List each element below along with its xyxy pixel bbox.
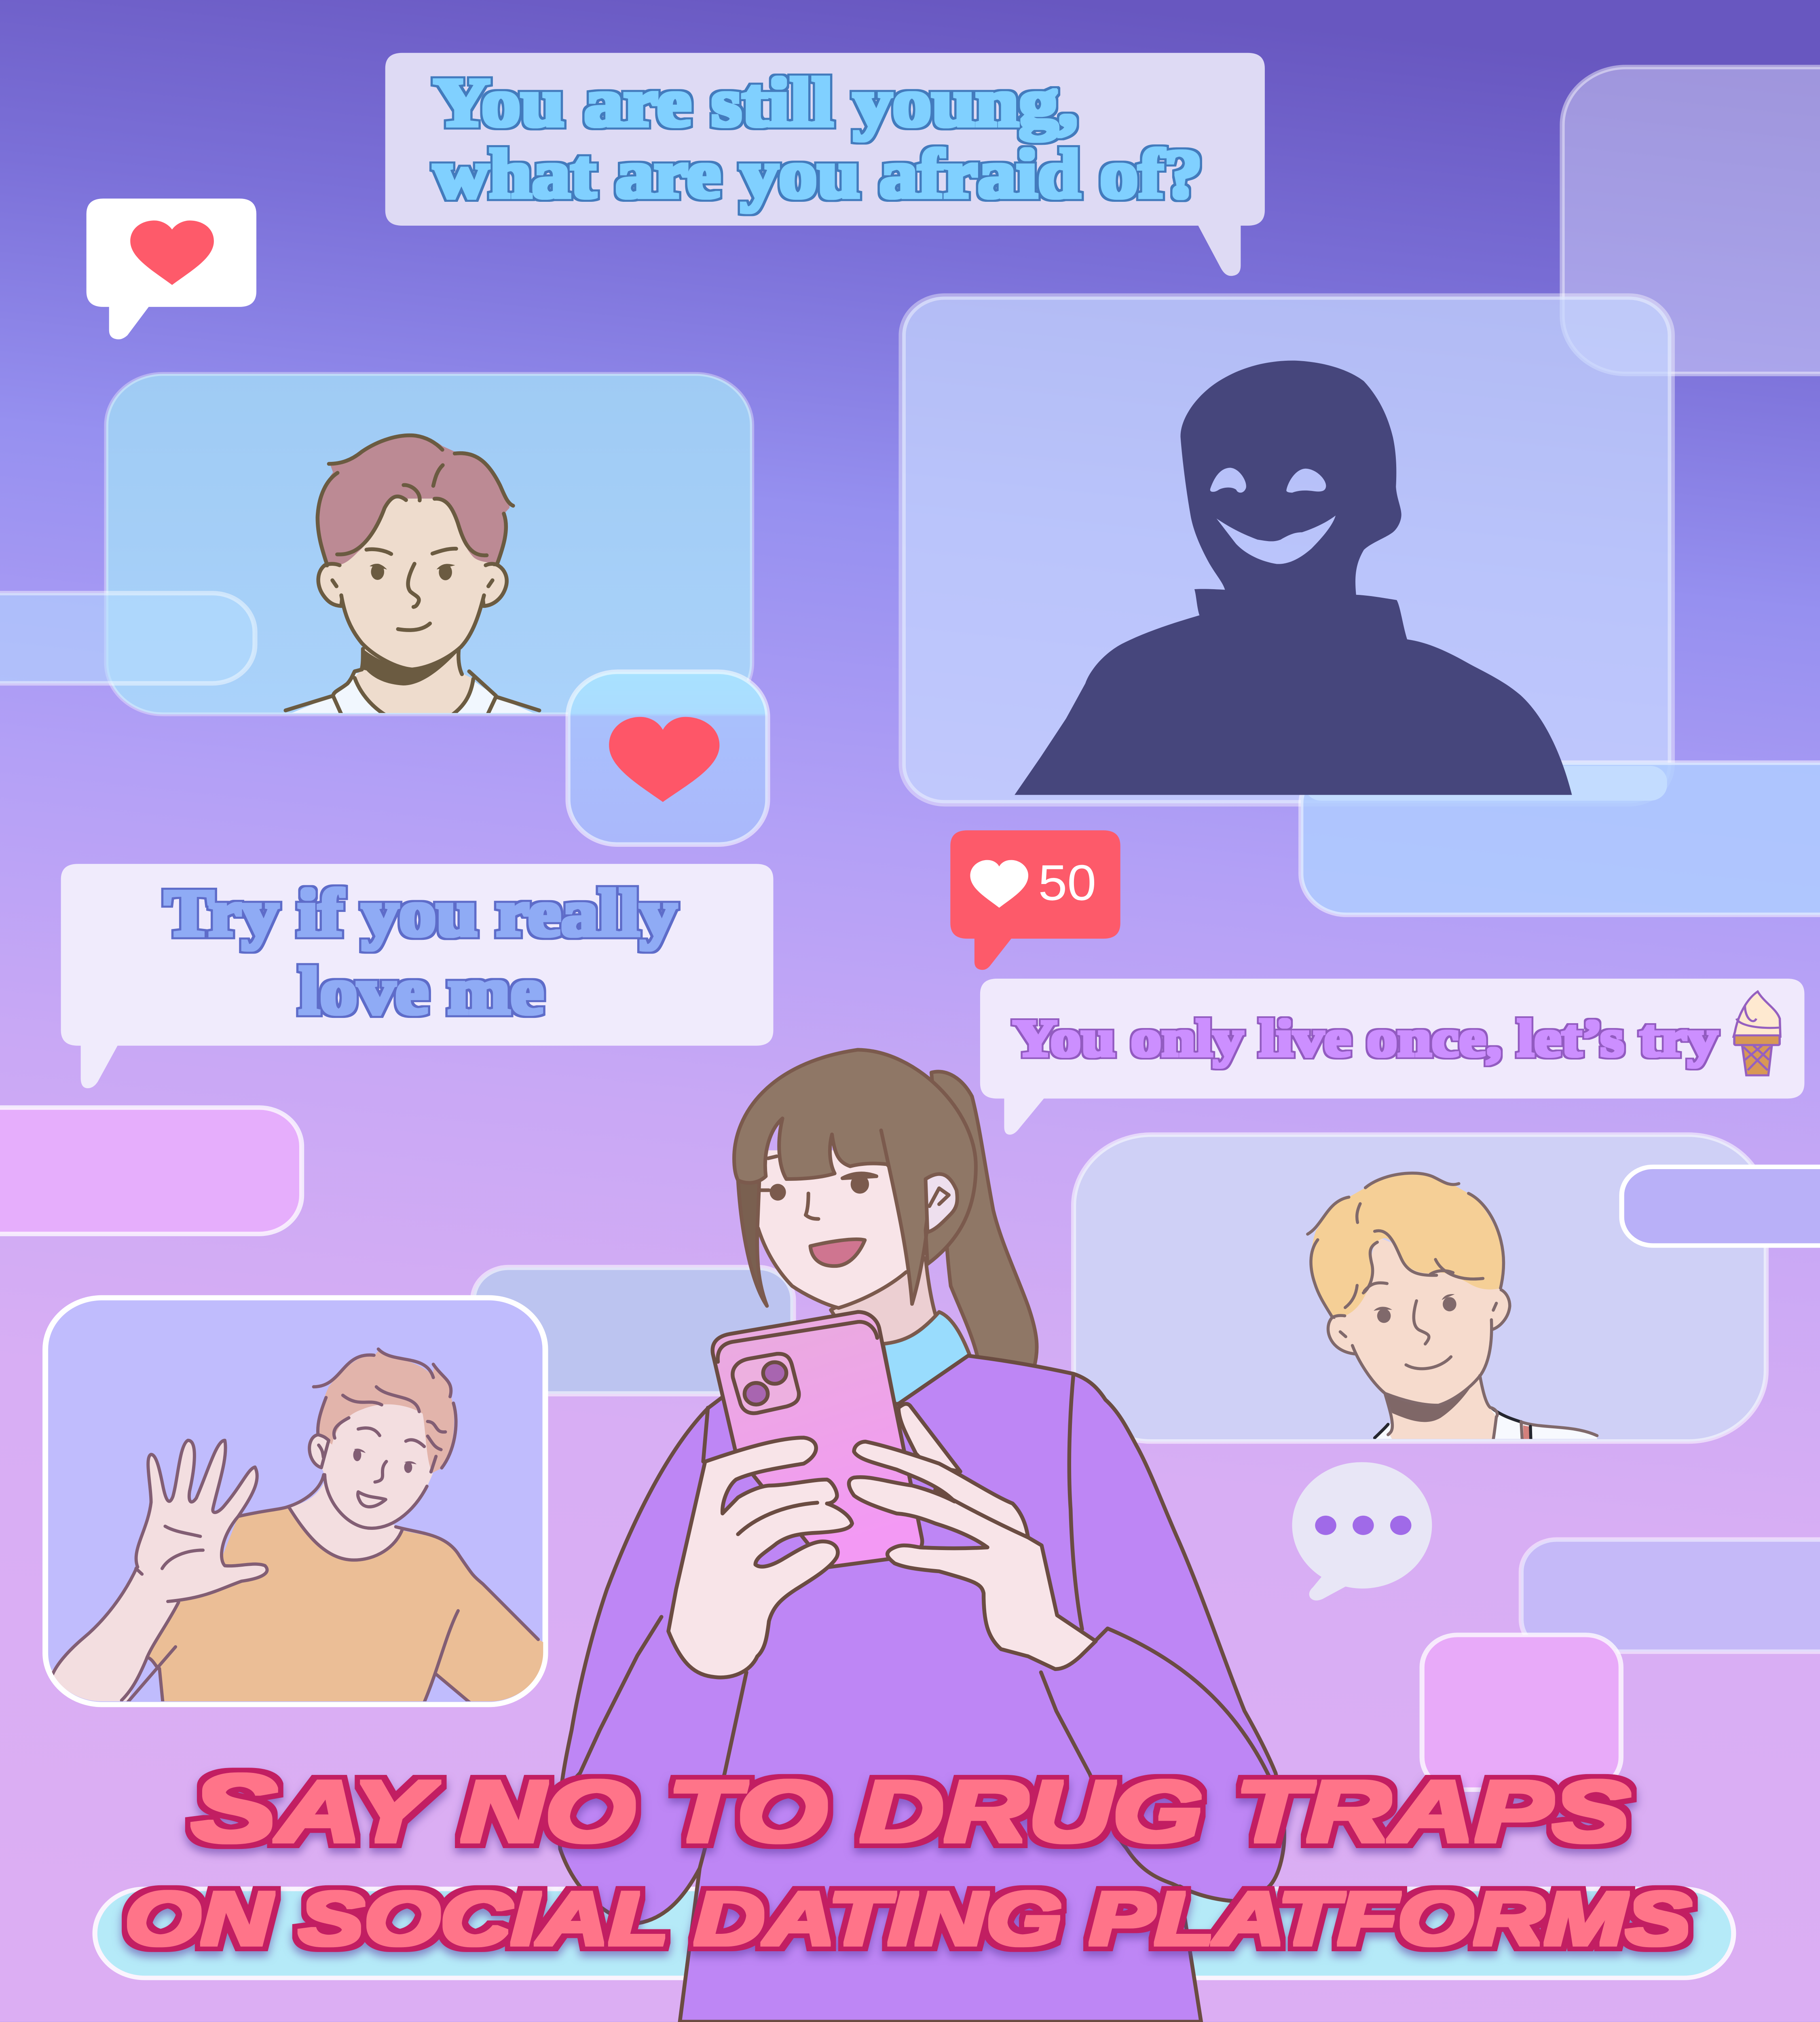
girl: head and hair <box>734 1050 1037 1404</box>
text: like count: 50 <box>1038 854 1096 911</box>
panel: centre glass behind girl <box>473 1267 793 1394</box>
title line two: ON SOCIAL DATING PLATFORMS <box>125 1877 1691 1961</box>
panel: boy one video window <box>106 374 752 714</box>
panel: waving boy video window <box>45 1298 545 1705</box>
character: man with pink hair <box>283 436 541 717</box>
icon: ice cream cone <box>1733 992 1780 1075</box>
panel: pink glass left <box>0 1108 302 1234</box>
text: try if you really love me: love me <box>299 954 544 1028</box>
text: you are still young: what are you afraid of? <box>433 136 1203 213</box>
icon: three dots <box>1315 1516 1411 1535</box>
panel: lower right glass <box>1521 1540 1820 1652</box>
text: you only live once: You only live once, let’s try <box>1013 1009 1718 1068</box>
panel: boy three video window <box>1074 1135 1766 1442</box>
panel: suspect video window <box>902 296 1671 803</box>
speech bubble: white heart bubble <box>87 199 256 339</box>
panel: small left glass <box>0 593 255 683</box>
speech bubble: typing dots <box>1292 1462 1432 1601</box>
phone <box>712 1312 922 1567</box>
hand: back thumb <box>898 1404 960 1472</box>
panel: top right glass <box>1562 67 1820 374</box>
hand: viewer left <box>668 1438 852 1677</box>
panel: small white outlined glass <box>1622 1167 1820 1246</box>
icon: white heart <box>970 860 1028 908</box>
hand: viewer right <box>849 1442 1096 1669</box>
text: try if you really love me: Try if you really <box>164 876 677 950</box>
speech bubble: you only live once <box>980 979 1804 1135</box>
speech bubble: try if you really love me <box>61 864 773 1088</box>
character: man with blond hair <box>1308 1173 1597 1453</box>
title: say no to drug traps on social dating platforms <box>125 1755 1691 1961</box>
panel: lower right pink glass <box>1422 1635 1621 1789</box>
icon: large red heart <box>609 717 719 802</box>
title line one: S AY NO TO DRUG TRAPS <box>191 1755 1630 1861</box>
character: girl holding phone <box>559 1050 1284 2022</box>
silhouette of drug trafficker <box>1015 361 1572 795</box>
text: you are still young: You are still young, <box>433 64 1078 141</box>
girl: pink phone and hands <box>668 1312 1096 1677</box>
icon: heart <box>130 220 214 285</box>
text: try if you really love me <box>164 876 677 1028</box>
panel: heart glass tile <box>568 672 767 844</box>
girl: purple sweater <box>559 1356 1284 2022</box>
panel: right blue glass <box>1301 763 1820 915</box>
text: you are still young <box>433 64 1203 213</box>
notification: 50 likes <box>950 830 1120 970</box>
speech bubble: you are still young <box>385 53 1265 276</box>
character: waving boy in orange shirt <box>47 1349 566 1716</box>
panel: title pill <box>95 1889 1733 1978</box>
